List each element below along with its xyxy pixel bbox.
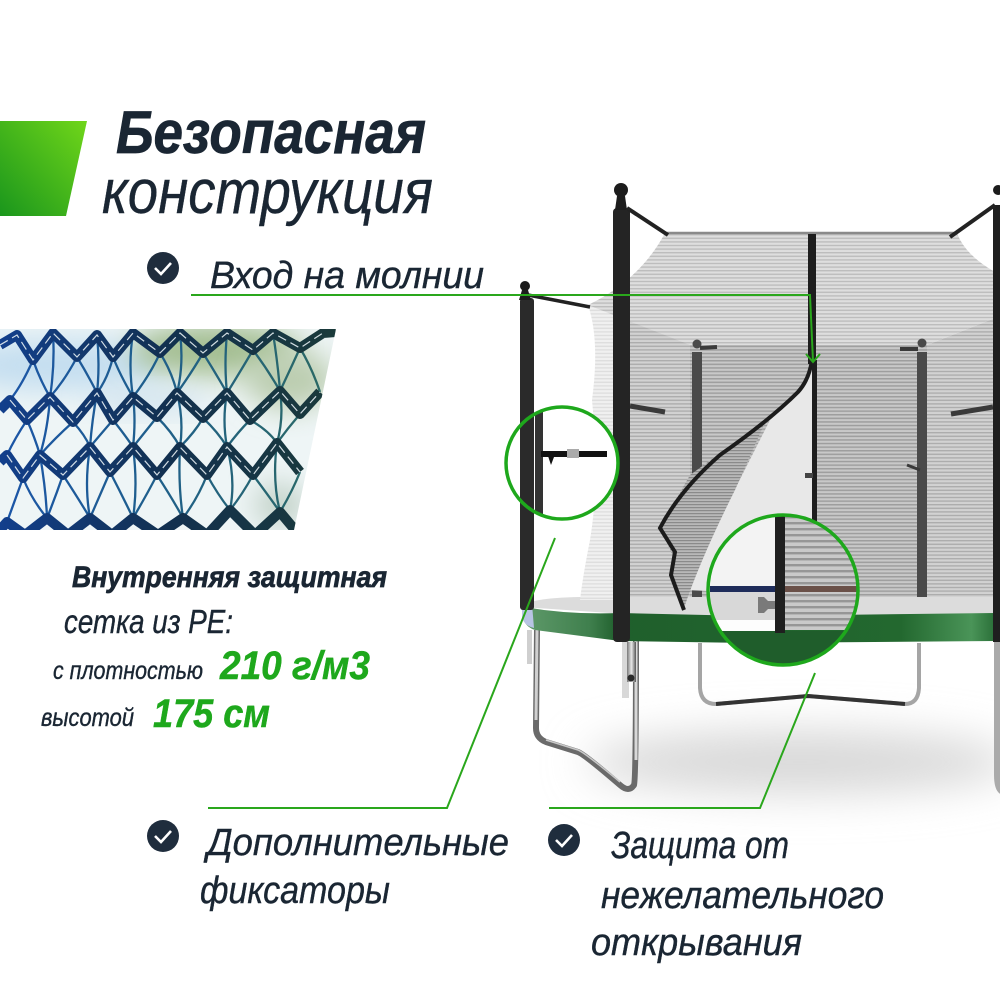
title: Безопасная (116, 99, 426, 166)
title: конструкция (102, 158, 433, 227)
callout line: extra fasteners (208, 538, 555, 808)
net specs text: сетка из PE: (64, 603, 233, 640)
back straps (630, 347, 993, 470)
deck surface (522, 597, 995, 618)
header green parallelogram (0, 121, 87, 216)
label: zipper entrance: Вход на молнии (210, 255, 484, 297)
label: extra fasteners (200, 822, 509, 912)
label: protection: нежелательного (601, 875, 884, 917)
net specs text: 175 см (153, 692, 270, 736)
opening behind door (684, 365, 812, 595)
net photo (0, 324, 336, 535)
icon: check protection (548, 824, 580, 856)
right net side (927, 318, 995, 597)
label: protection (591, 825, 884, 964)
label: protection: открывания (591, 922, 802, 964)
leg sleeves (527, 630, 636, 698)
right top strap (950, 205, 995, 237)
front left net panel (622, 296, 690, 597)
vertical zipper lower (812, 360, 817, 525)
right post ball (993, 185, 1000, 195)
net specs text: с плотностью (53, 657, 203, 685)
top net (588, 233, 995, 345)
left post ball (519, 281, 531, 300)
magnifier circle: fastener (504, 405, 620, 521)
icon: check zipper entrance (147, 252, 179, 284)
title (102, 99, 433, 227)
top net edge (665, 232, 957, 234)
label: protection: Защита от (611, 825, 789, 867)
front post strap (627, 208, 668, 235)
callout line: protection (549, 673, 815, 808)
net specs text: высотой (41, 704, 134, 732)
left post strap (528, 295, 590, 307)
green frame band (524, 607, 995, 643)
back net (620, 345, 995, 597)
back leg lower bar (716, 696, 905, 704)
right post (993, 205, 1000, 642)
right leg (997, 640, 1000, 792)
front post ball (614, 183, 628, 210)
door flap (660, 420, 766, 608)
net specs text (41, 561, 387, 736)
back posts (692, 338, 927, 597)
label: extra fasteners: фиксаторы (200, 870, 390, 912)
net specs text: 210 г/м3 (219, 644, 370, 688)
net specs text: Внутренняя защитная (72, 561, 387, 594)
zipper slider (805, 473, 813, 478)
callout line: zipper (191, 295, 820, 362)
vertical zipper top (808, 234, 816, 364)
left side net (580, 290, 622, 600)
blue frame highlight (522, 604, 534, 628)
left post (520, 298, 534, 610)
trampoline (519, 183, 1000, 792)
magnifier circle: zipper guard (706, 513, 860, 667)
door zipper (660, 360, 812, 610)
back legs (700, 643, 919, 704)
label: extra fasteners: Дополнительные (203, 822, 509, 864)
front post (613, 208, 630, 642)
ground shadow (585, 732, 1000, 792)
left front leg (536, 630, 636, 789)
icon: check fasteners (147, 820, 179, 852)
